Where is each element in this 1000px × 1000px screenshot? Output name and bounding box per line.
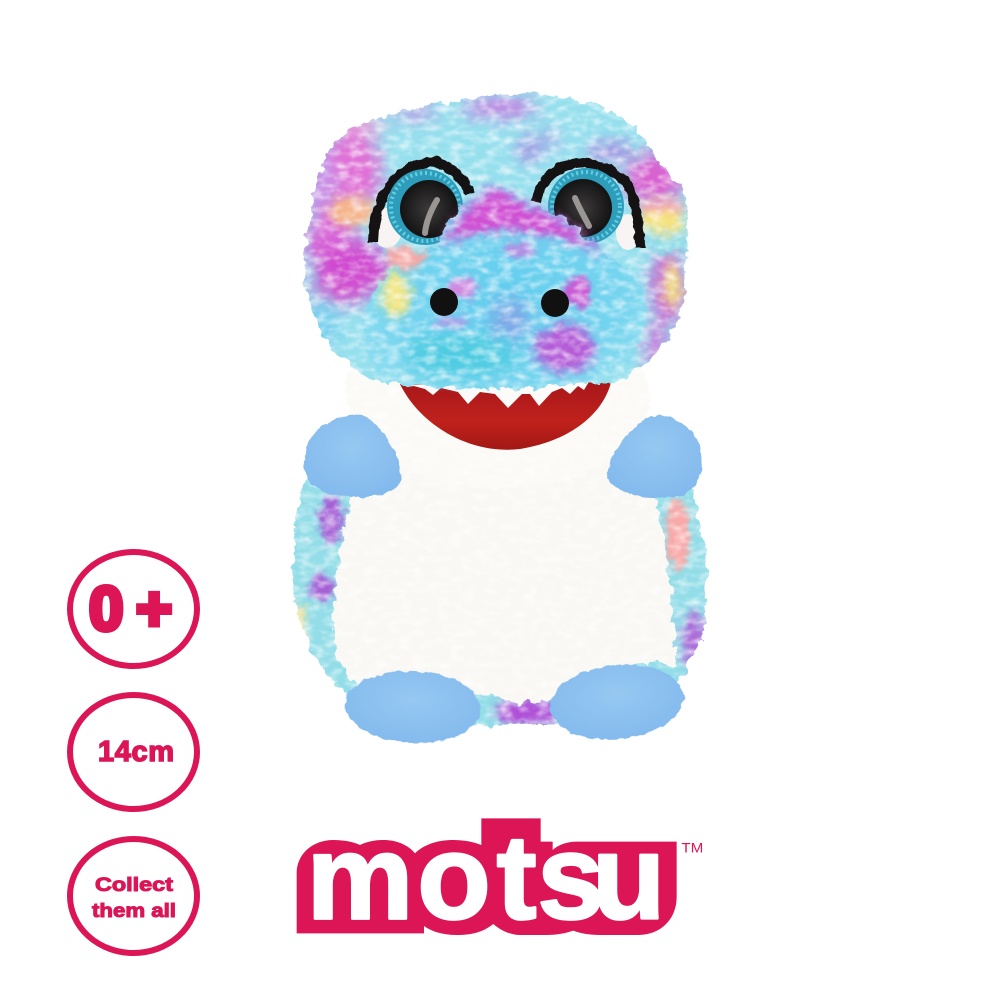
right foot [546, 658, 688, 746]
left foot [343, 667, 483, 747]
right arm [607, 415, 702, 497]
badge: size 14cm [70, 695, 197, 809]
toy body back fur [290, 417, 710, 728]
badge: age 0+ [70, 552, 197, 666]
left eye [372, 162, 470, 248]
badge: collect them all: Collect [95, 875, 174, 896]
badge: collect them all [70, 839, 197, 953]
plush toy: rainbow dinosaur [280, 80, 720, 750]
left nostril [430, 288, 458, 316]
red open mouth [400, 378, 612, 450]
motsu logo [297, 810, 703, 944]
head yellow and orange rainbow patches [328, 197, 688, 309]
logo wordmark: motsu [307, 810, 665, 944]
head magenta patches left [304, 99, 685, 367]
logo crimson backing shape [297, 818, 677, 935]
right eye [536, 163, 640, 250]
badge: size 14cm: 14cm [98, 736, 174, 768]
teeth [410, 380, 590, 408]
snout with magenta brow [364, 180, 647, 389]
left pink and yellow snout patches [385, 248, 425, 268]
right nostril [541, 289, 569, 317]
head fur with colour patches [302, 91, 690, 387]
white belly [333, 462, 676, 703]
badge: collect them all: them all [92, 901, 176, 922]
magenta brow patch [440, 185, 604, 256]
purple muzzle patch [535, 324, 595, 372]
badge: age 0+: 0+ [89, 575, 172, 644]
white collar fur and lower jaw [345, 360, 649, 488]
logo trademark: TM [681, 840, 703, 856]
left arm [304, 415, 401, 497]
